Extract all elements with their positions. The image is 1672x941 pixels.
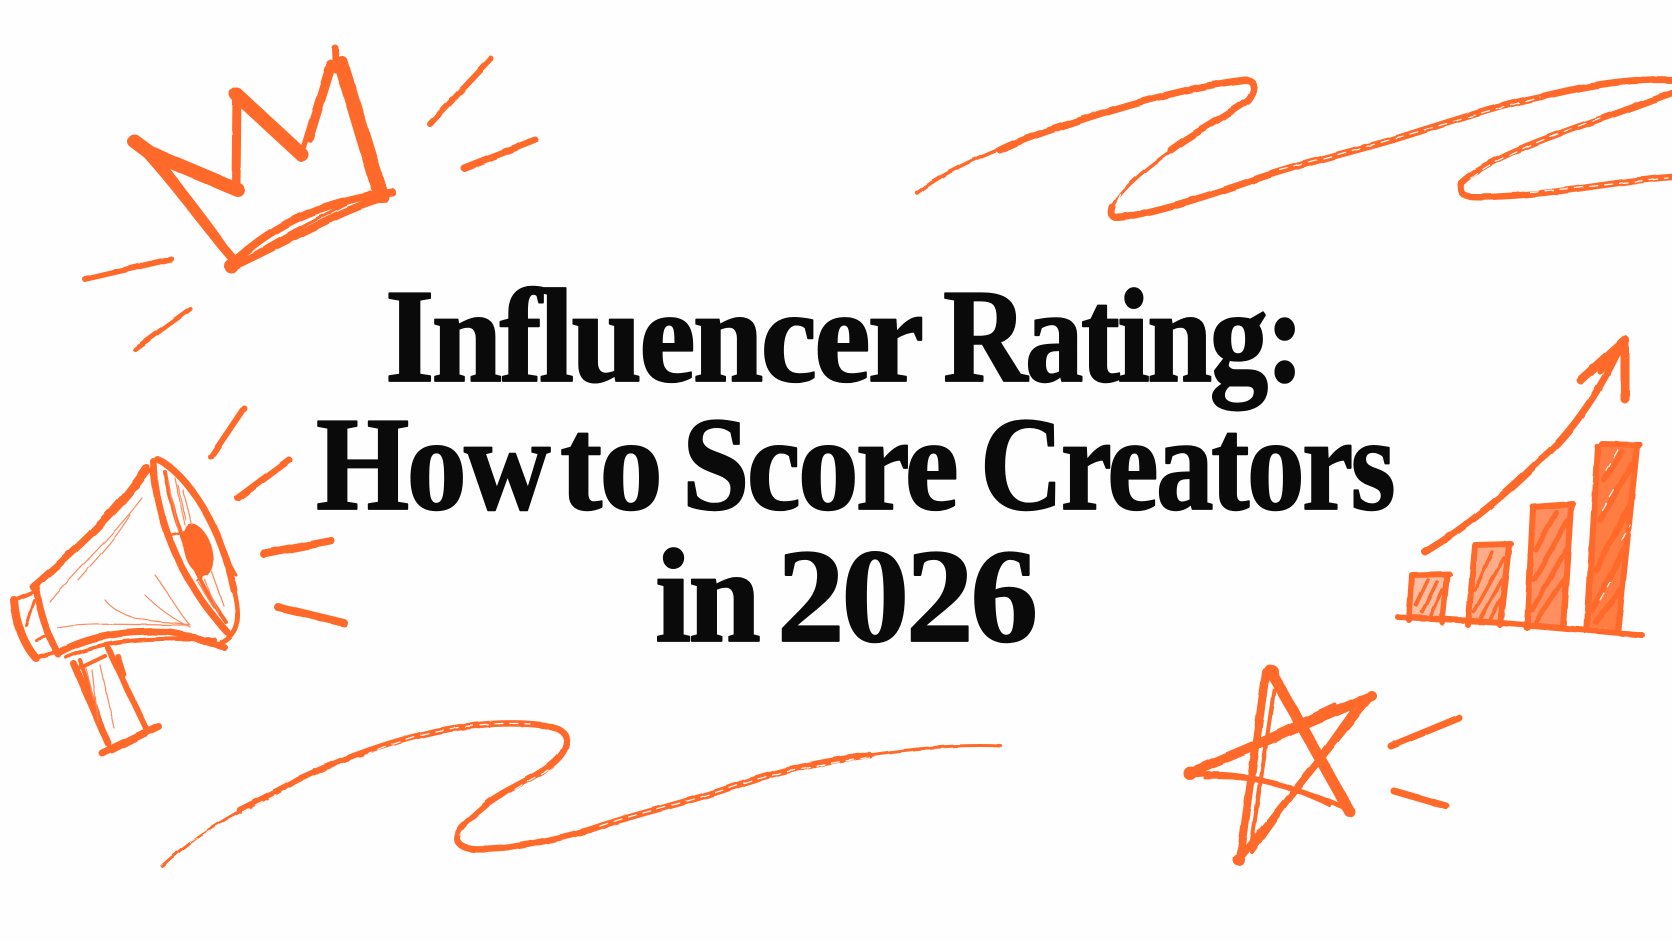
growth arrow bbox=[1425, 340, 1625, 552]
icon: crown bbox=[134, 48, 392, 273]
star sparks bbox=[1391, 718, 1459, 806]
megaphone sparks bbox=[211, 408, 344, 623]
baseline bbox=[1398, 617, 1642, 635]
speaker center bbox=[168, 478, 224, 612]
top swoosh bbox=[917, 80, 1672, 217]
title line 2: How bbox=[316, 390, 551, 538]
bar 1 bbox=[1409, 574, 1449, 622]
title line 3: in bbox=[655, 522, 759, 670]
icon: growth bar chart with arrow bbox=[1398, 340, 1642, 635]
bell rim bbox=[153, 459, 238, 642]
title line 3: 2026 bbox=[777, 522, 1035, 670]
icon: megaphone bbox=[14, 459, 238, 753]
title line 1: Rating: bbox=[943, 262, 1302, 411]
back ring bbox=[14, 586, 62, 658]
handle bbox=[74, 648, 158, 753]
cone bbox=[33, 467, 224, 657]
bar 4 bbox=[1587, 444, 1640, 630]
title line 1: Influencer bbox=[385, 262, 922, 410]
title line 2: Score bbox=[682, 390, 956, 538]
title line 2: Creators bbox=[980, 390, 1393, 538]
icon: star bbox=[1183, 665, 1372, 866]
title bbox=[316, 262, 1393, 670]
crown sparks bbox=[85, 59, 535, 349]
bar 3 bbox=[1527, 504, 1573, 628]
bar 2 bbox=[1468, 544, 1511, 625]
title line 2: to bbox=[560, 390, 660, 538]
bottom swoosh bbox=[162, 723, 1001, 866]
